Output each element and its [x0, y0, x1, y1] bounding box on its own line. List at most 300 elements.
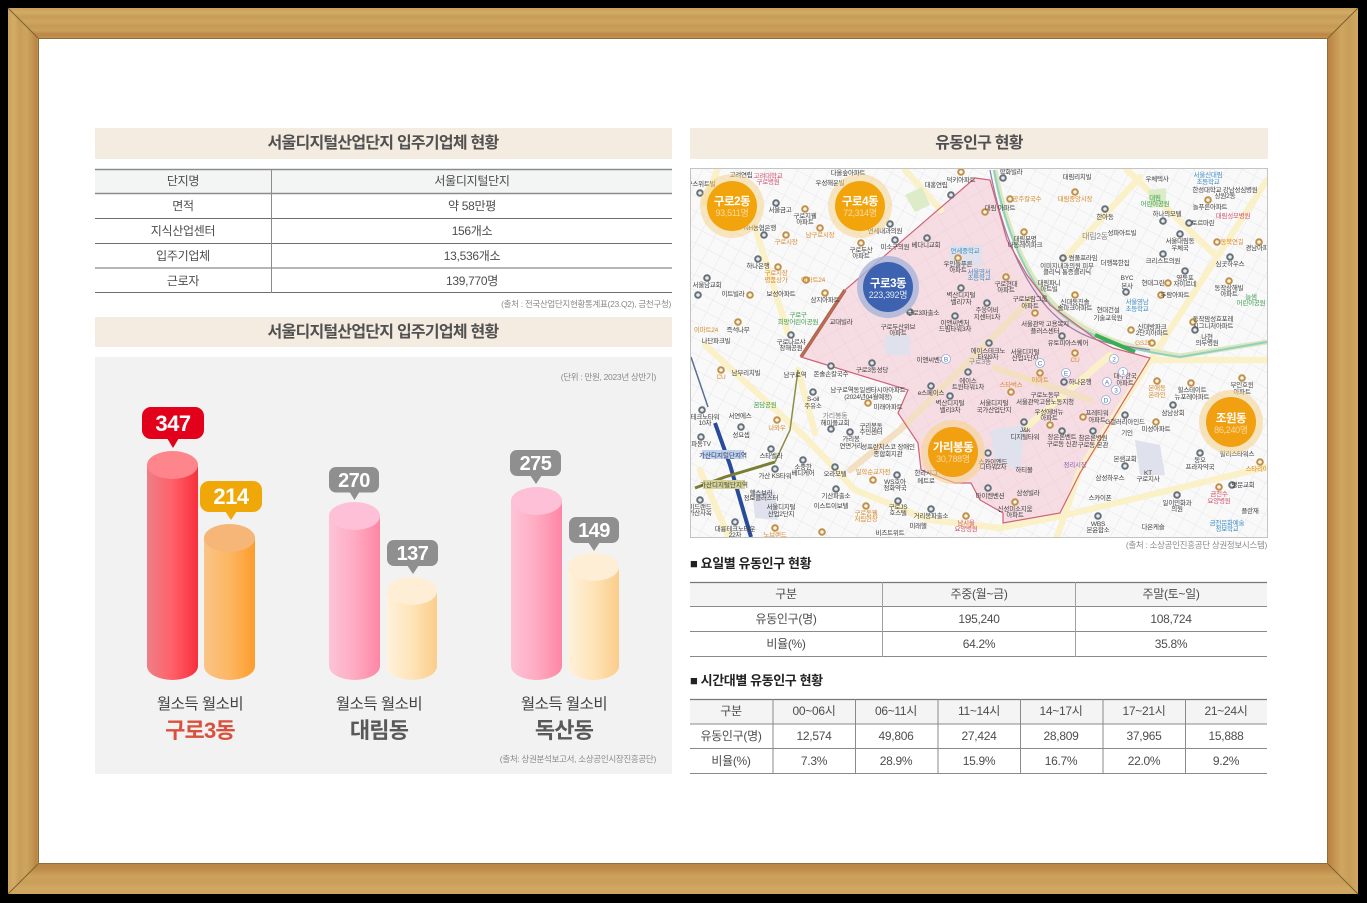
map pins: C — [1038, 360, 1043, 368]
map place labels: 나단파크빌 — [702, 336, 731, 345]
map place labels: 거리봉파출소 — [914, 511, 949, 520]
map place labels: 남구로역 — [783, 370, 807, 379]
map place labels: 창해공원 — [779, 343, 803, 352]
map place labels: 구로3동성당 — [856, 365, 888, 374]
group: 독산동: 월소득 월소비 — [521, 695, 607, 713]
map place labels: 동북연길 — [1220, 238, 1244, 246]
map place labels: 삼성빌라 — [1016, 488, 1040, 497]
map place labels: 플러스센터 — [1031, 326, 1060, 335]
map place labels: 나동레이파크 — [1008, 240, 1043, 249]
map place labels: 고려연립 — [729, 170, 753, 179]
map place labels: 성요셉 — [732, 430, 750, 439]
map place labels: 구로지웰 — [793, 211, 817, 220]
table: time of day population: 27,424 — [962, 729, 997, 743]
map place labels: 가산사옥 — [688, 508, 712, 517]
table: time of day population: 16.7% — [1045, 754, 1078, 768]
table: time of day population: 22.0% — [1128, 754, 1161, 768]
map place labels: 에이스 — [959, 376, 977, 385]
map place labels: 서울금고 — [768, 205, 792, 214]
map place labels: 즉석나무 — [726, 325, 750, 334]
map place labels: 구리봉동 — [859, 421, 883, 430]
table: time of day population: 28.9% — [880, 754, 913, 768]
map place labels: 정보클러스터 — [744, 493, 779, 502]
map place labels: 기산파출소 — [822, 491, 851, 500]
map place labels: 구로현대 — [994, 280, 1018, 288]
map place labels: 구로시장 — [774, 237, 798, 246]
table: tenant status: 약 58만평 — [448, 198, 496, 213]
map place labels: 트윈타워1차 — [952, 382, 984, 391]
map place labels: 고려대학교 — [754, 171, 783, 180]
table: time of day population — [690, 699, 1267, 774]
map place labels: 상원2동 — [1215, 191, 1236, 200]
map place labels: 하나의모텔 — [1153, 209, 1182, 218]
map place labels: 구로노동부 — [1031, 391, 1060, 399]
map place labels: 온라인 — [1148, 390, 1166, 399]
table: time of day population: 15,888 — [1209, 729, 1244, 743]
bubble: 조원동 — [1199, 390, 1263, 454]
map place labels: 정보학교 — [1215, 524, 1239, 533]
map place labels: 기술교육원 — [1094, 313, 1123, 322]
map pins: 3 — [1114, 388, 1118, 394]
map place labels: 타워9차 — [978, 352, 999, 361]
map place labels: 비즈트위트 — [876, 528, 905, 537]
roads — [700, 168, 1267, 540]
table: weekday population — [690, 582, 1267, 657]
map place labels: 구로나르샤 — [777, 337, 806, 346]
map place labels: 우성해운빌 — [816, 178, 845, 187]
bubble: 구로4동: 구로4동 — [842, 195, 879, 208]
group: 독산동: 독산동 — [535, 718, 594, 743]
map place labels: 대림 — [1149, 194, 1161, 202]
map place labels: 남시울 — [957, 518, 975, 527]
map place labels: 금천문화예술 — [1210, 518, 1245, 527]
group: 독산동 — [510, 450, 619, 743]
map place labels: 종합회지관 — [874, 449, 903, 458]
map place labels: 장은론벤트 — [1048, 432, 1077, 441]
map place labels: 밸리7차 — [951, 297, 972, 306]
map place labels: 테크노타워 — [691, 412, 720, 421]
bubble: 구로4동: 72,314명 — [843, 208, 877, 218]
table: weekday population: 주말(토~일) — [1142, 587, 1200, 601]
map place labels: 놀푸른아파트 — [1193, 202, 1228, 211]
table: time of day population: 00~06시 — [793, 704, 835, 718]
map place labels: 토르마린 — [1191, 218, 1215, 227]
map place labels: 밸리3차 — [940, 405, 961, 414]
map place labels: 희망어린이공원 — [778, 317, 818, 326]
map points of interest: grey — [695, 175, 1235, 525]
map place labels: 부인호윈 — [1230, 380, 1254, 389]
map place labels: 두람아파트 — [1161, 290, 1190, 299]
map place labels: 대림2동 — [1082, 231, 1108, 241]
map place labels: NH농협은행 — [744, 223, 776, 232]
map place labels: 대림분명 — [1013, 234, 1037, 243]
map place labels: 요양병원 — [954, 524, 978, 533]
map place labels: 가리봉동 — [823, 411, 848, 420]
map place labels: 구스위트빌 — [687, 180, 716, 188]
map place labels: 대륭테크노타운 — [715, 524, 755, 533]
heading: tenant status table: 서울디지털산업단지 입주기업체 현황 — [268, 134, 499, 152]
map place labels: 서연에스 — [728, 411, 752, 420]
heading: floating population — [690, 128, 1268, 159]
map place labels: 삼지아파트 — [811, 295, 840, 304]
table: tenant status: 면적 — [172, 199, 194, 213]
map place labels: 베디케어 — [791, 468, 815, 477]
map place labels: 대림파니 — [1037, 278, 1061, 287]
group: 대림동: 월소득 월소비 — [336, 695, 422, 713]
heading: income chart — [95, 317, 672, 347]
map place labels — [687, 167, 1269, 539]
map place labels: 시그니처아파트 — [1193, 321, 1233, 330]
table: tenant status: 139,770명 — [446, 274, 498, 288]
bubble: 조원동: 조원동 — [1216, 411, 1247, 425]
map place labels: 다온케슬 — [1141, 522, 1165, 531]
group: 구로3동: 214 — [213, 484, 250, 509]
map place labels: 구로지사 — [1136, 474, 1160, 483]
map place labels: 돈솔손칼국수 — [814, 369, 849, 378]
table: weekday population: 195,240 — [958, 612, 1000, 626]
map place labels: 서울디지털 — [1011, 347, 1040, 356]
map place labels: 서울신대림 — [1194, 170, 1223, 179]
map place labels: 벽산디지털 — [947, 290, 976, 299]
map place labels: 파동TV — [691, 439, 712, 448]
map place labels: 산업2단지 — [768, 509, 794, 518]
table: tenant status: 지식산업센터 — [151, 224, 215, 238]
map place labels: 이마트 — [1031, 375, 1049, 384]
map place labels: 동작상해빌 — [1215, 283, 1244, 292]
bubble: 가리봉동 — [921, 420, 985, 484]
map place labels: 일학순교자전 — [856, 467, 891, 476]
map place labels: 지센터1차 — [974, 312, 1000, 321]
map place labels: 공주칼국수 — [1013, 195, 1042, 203]
map place labels: 구로병원 — [756, 177, 780, 186]
map place labels: 기인 — [1121, 428, 1133, 437]
map place labels: 한성대학교 강남성심병원 — [1192, 185, 1258, 194]
map place labels: 국가산업단지 — [977, 405, 1012, 414]
map pins: D — [1104, 398, 1109, 404]
map place labels: 뉴포레아파트 — [1175, 392, 1210, 401]
group: 대림동: 대림동 — [350, 718, 409, 743]
map place labels: 정화약국 — [883, 483, 907, 492]
map place labels: 오라모텔 — [823, 469, 847, 478]
map place labels: 노브랜드 — [763, 530, 787, 539]
map place labels: 호스텔 — [889, 509, 907, 517]
map place labels: 클리닉 통증클리닉 — [1043, 267, 1091, 276]
map place labels: 아파트 — [1021, 301, 1039, 310]
subway station names: 가산디지털단지역 — [700, 480, 748, 489]
table: tenant status: 13,536개소 — [444, 249, 500, 263]
map place labels: 구로동 신관 — [1047, 439, 1077, 448]
map place labels: 소중한 — [794, 463, 812, 471]
map place labels: 솔파크아파트 — [1058, 303, 1093, 312]
map place labels: 스타리아 — [1245, 464, 1269, 473]
map place labels: 이마트24 — [694, 325, 719, 334]
district boundary line — [801, 178, 1150, 523]
map place labels: 서울영남 — [1125, 297, 1149, 306]
unit note: (단위 : 만원, 2023년 상반기) — [561, 372, 656, 382]
group: 구로3동 — [142, 407, 262, 743]
map place labels: 구로두산위브 — [881, 322, 916, 331]
green parks — [905, 187, 1166, 212]
table: time of day population: 49,806 — [879, 729, 914, 743]
map place labels: 유토피아스퀘어 — [1048, 338, 1088, 347]
source note: map: (출처 : 소상공인진흥공단 상권정보시스템) — [1126, 540, 1267, 550]
map place labels: 아파트 — [796, 217, 814, 226]
map place labels: CU — [716, 374, 726, 381]
bubble: 가리봉동: 가리봉동 — [933, 440, 974, 454]
source note: chart: (출처: 상권분석보고서, 소상공인시장진흥공단) — [500, 754, 656, 764]
map place labels: 스카이폰 — [1088, 493, 1112, 502]
map place labels: 가산 KS타워 — [758, 471, 792, 480]
map place labels: 보성아파트 — [767, 289, 796, 298]
heading: tenant status table — [95, 128, 672, 159]
map place labels: 참은론병원 — [1079, 433, 1108, 442]
map place labels: 미소구의원 — [881, 242, 910, 251]
map place labels: 이스트이보텔 — [814, 501, 849, 510]
map place labels: 삼남상회 — [1161, 408, 1185, 417]
map place labels: 일이민화과 — [1163, 498, 1192, 507]
map place labels: 연세중학교 — [951, 246, 980, 255]
bubble: 구로3동: 223,392명 — [869, 290, 907, 300]
map pins: 2 — [1112, 356, 1116, 364]
map pins: 1 — [1121, 370, 1125, 376]
map place labels: 본윤합소 — [1086, 525, 1110, 534]
map place labels: 산업1단지 — [1012, 353, 1038, 362]
map place labels: 서울영서 — [967, 267, 991, 276]
map points of interest: orange — [718, 169, 1263, 535]
map place labels: 나현 — [1201, 332, 1213, 341]
map place labels: BYC — [1121, 275, 1134, 282]
table: time of day population: 유동인구(명) — [700, 729, 762, 743]
map place labels: 서울남교회 — [693, 280, 722, 289]
table: time of day population: 21~24시 — [1205, 704, 1247, 718]
map place labels: 나와우 — [768, 423, 786, 432]
map place labels: e스페이스 — [918, 388, 944, 397]
table: weekday population: 비율(%) — [766, 637, 806, 651]
map pins — [942, 354, 1128, 404]
map place labels: 경남아파 — [1245, 243, 1269, 252]
map place labels: 아파트 — [1220, 289, 1238, 298]
map place labels: 남구로역동일센타시아아파트 — [830, 385, 906, 394]
map place labels: 프라자약국 — [1186, 462, 1215, 471]
map place labels: 스카이엔드 — [979, 457, 1008, 466]
map place labels: 본애동 — [1148, 383, 1166, 392]
buildings blocks — [752, 245, 1165, 520]
table: weekday population: 64.2% — [963, 637, 996, 651]
map place labels: 아파트 — [949, 265, 967, 274]
map place labels: 신대방파크 — [1138, 322, 1167, 331]
map place labels: 2단지아파트 — [1136, 328, 1168, 337]
map place labels: 힐스테이트 — [1178, 385, 1207, 394]
bubble: 구로3동 — [857, 256, 919, 318]
map place labels: 가리봉 — [842, 434, 860, 443]
map place labels: 정리시장 — [1063, 460, 1087, 469]
map place labels: 본사 — [1121, 281, 1133, 290]
map place labels: 10차 — [699, 418, 712, 427]
map place labels: S-oil — [807, 396, 820, 403]
map place labels: 이앤씨벤처 — [917, 355, 946, 364]
map pins: A — [1105, 380, 1110, 386]
map place labels: 어린이공원 — [1237, 298, 1266, 307]
map place labels: 크리스트의원 — [1146, 256, 1181, 265]
map place labels: 에이스테크노 — [971, 346, 1006, 355]
table: time of day population: 06~11시 — [875, 704, 917, 718]
table: tenant status: 단지명 — [167, 174, 199, 188]
map place labels: 서울디지털 — [767, 502, 796, 511]
heading: floating population: 유동인구 현황 — [935, 134, 1024, 152]
table: time of day population: 비율(%) — [711, 754, 751, 768]
subheading: time of day population: ■ 시간대별 유동인구 현황 — [690, 673, 823, 688]
map place labels: 아파트 — [1006, 510, 1024, 519]
map place labels: 미래아파트 — [874, 402, 903, 411]
map place labels: 명품상가 — [764, 275, 788, 284]
heading: income chart: 서울디지털산업단지 입주기업체 현황 — [268, 323, 499, 341]
map place labels: 이트빌라 — [721, 289, 745, 298]
map place labels: 플란재 — [1241, 507, 1259, 515]
map place labels: 성파아트빌 — [1108, 228, 1137, 237]
bubble: 구로2동 — [700, 174, 764, 238]
map place labels: 영등포 — [1176, 273, 1194, 282]
map place labels: 우인놀푸른 — [944, 259, 973, 268]
map place labels: 주민센터 — [859, 427, 883, 436]
bubble: 조원동: 86,240명 — [1214, 425, 1248, 435]
bubble: 가리봉동: 30,788명 — [936, 454, 970, 464]
map place labels: 마이켄벤션 — [976, 491, 1005, 500]
table: tenant status: 서울디지털단지 — [434, 174, 510, 188]
map place labels: 하나은행 — [1068, 377, 1092, 386]
bubble: 구로2동: 구로2동 — [714, 195, 751, 208]
bubble: 구로2동: 93,511명 — [715, 208, 749, 218]
map place labels: 서울관악 고용복지 — [1021, 319, 1069, 328]
map place labels: 아파트 — [1116, 378, 1134, 387]
subway station names — [699, 450, 748, 489]
map place labels: 본샘교회 — [1113, 455, 1137, 463]
map place labels: 학화빌라 — [999, 167, 1023, 176]
group: 대림동: 270 — [338, 470, 370, 492]
map place labels: 주웅이비 — [975, 305, 999, 314]
map place labels: 아파트 — [1088, 415, 1106, 424]
table: tenant status: 입주기업체 — [156, 249, 210, 263]
map place labels: 대림중앙시장 — [1058, 194, 1093, 203]
map place labels: 벽산디지털 — [936, 398, 965, 407]
map place labels: 구로구 — [789, 311, 807, 319]
map place labels: G갤러리아인드 — [1105, 417, 1145, 426]
map place labels: GS25 — [1135, 340, 1151, 347]
table: tenant status: 근로자 — [167, 274, 199, 288]
map place labels: 베다니교회 — [912, 240, 941, 249]
map place labels: 우체국 — [1171, 244, 1189, 252]
map place labels: 서울관악고용노동지청 — [1016, 397, 1074, 406]
group: 독산동: 275 — [520, 453, 552, 475]
map place labels: 신대동진솔 — [1061, 297, 1090, 306]
map place labels: 아파트 — [997, 285, 1015, 294]
map place labels: 서울대림동 — [1166, 236, 1195, 245]
group: 구로3동: 347 — [155, 411, 191, 436]
map place labels: 스타벨라 — [759, 451, 783, 460]
map place labels: 대림성모병원 — [1216, 211, 1251, 220]
map place labels: 구로JS — [889, 503, 908, 511]
map place labels: 구로동 본관 — [1078, 440, 1108, 449]
map place labels: 서울디지털 — [980, 398, 1009, 407]
map place labels: 썸풀프라임 — [1069, 253, 1098, 262]
group: 구로3동: 구로3동 — [165, 718, 235, 743]
map place labels: 신성미소지움 — [998, 504, 1033, 513]
map place labels: 구로동웰 — [854, 508, 878, 517]
map place labels: 아파트 — [1233, 387, 1251, 396]
map place labels: 구로보람그룹 — [1013, 295, 1048, 303]
map place labels: 요양병원 — [1207, 496, 1231, 505]
table: time of day population: 17~21시 — [1123, 704, 1165, 718]
table: time of day population: 14~17시 — [1040, 704, 1082, 718]
map place labels: 현대건설 — [1096, 305, 1120, 314]
bubble: 구로3동: 구로3동 — [870, 277, 907, 290]
table: time of day population: 28,809 — [1044, 729, 1079, 743]
map place labels: 금천수 — [1210, 489, 1228, 498]
map pins: B — [944, 356, 948, 364]
map place labels: 아트빌 — [1040, 284, 1058, 293]
map place labels: 대림리치빌 — [1063, 172, 1092, 181]
map place labels: 미드랜드 — [688, 502, 712, 511]
map place labels: 교대빌라 — [829, 317, 853, 326]
map place labels: 디타워2차 — [980, 462, 1006, 471]
subway station names: 가산디지털단지역 — [699, 450, 747, 460]
map place labels: 심곳하우스 — [1216, 259, 1245, 268]
table: tenant status — [95, 169, 672, 293]
table: time of day population: 37,965 — [1127, 729, 1162, 743]
table: time of day population: 구분 — [720, 704, 742, 718]
map place labels: (2024년04월예정) — [844, 392, 892, 401]
map place labels: 연세내과의원 — [868, 226, 903, 235]
map place labels: 아파트 — [1040, 413, 1058, 422]
map place labels: 해피플교회 — [821, 418, 850, 427]
map place labels: 22차 — [729, 530, 742, 539]
source note: tenant table: (출처 : 전국산업단지현황통계표(23.Q2), 금천구청) — [501, 299, 671, 309]
map place labels: 연면거리 — [839, 441, 863, 450]
district boundary fill — [801, 178, 1150, 523]
map place labels: 디지털타워 — [1011, 432, 1040, 441]
map place labels: 자이르네 — [1173, 279, 1197, 288]
table: time of day population: 12,574 — [797, 729, 832, 743]
map place labels: 다올숲아파트 — [831, 168, 866, 177]
map place labels: WBS — [1091, 521, 1106, 528]
map place labels: 의두병원 — [1195, 338, 1219, 347]
map place labels: 이앤씨벤처 — [941, 318, 970, 327]
map place labels: KT — [1144, 470, 1152, 477]
table: weekday population: 구분 — [775, 587, 797, 601]
river — [995, 170, 1267, 356]
map place labels: 힐리스타워스 — [1220, 449, 1255, 458]
map place labels: 대우한국 — [1113, 372, 1137, 380]
table: time of day population: 11~14시 — [958, 704, 1000, 718]
map place labels: 하티몰 — [1015, 465, 1033, 474]
map place labels: 꿈담공원 — [753, 400, 777, 409]
map place labels: 우성에버뉴 — [1035, 407, 1064, 416]
map place labels: 미래헬 — [909, 521, 927, 530]
map place labels: 한아동 — [1096, 212, 1114, 221]
map place labels: 동오 — [1194, 456, 1206, 464]
subway lines — [691, 357, 708, 407]
map place labels: 현대그린 — [1141, 279, 1165, 287]
table: weekday population: 35.8% — [1155, 637, 1188, 651]
map: floating population by district — [687, 167, 1269, 540]
bubble: 구로4동 — [828, 174, 892, 238]
map place labels: 어린이공원 — [1141, 199, 1170, 208]
map place labels: 드림타워3차 — [939, 324, 971, 333]
map place labels: 남부리치빌 — [732, 368, 761, 377]
map place labels: 구로시장 — [764, 268, 788, 277]
map place labels: WS호아 — [884, 477, 906, 486]
map place labels: 이마트24 — [801, 275, 826, 284]
table: time of day population: 15.9% — [963, 754, 996, 768]
